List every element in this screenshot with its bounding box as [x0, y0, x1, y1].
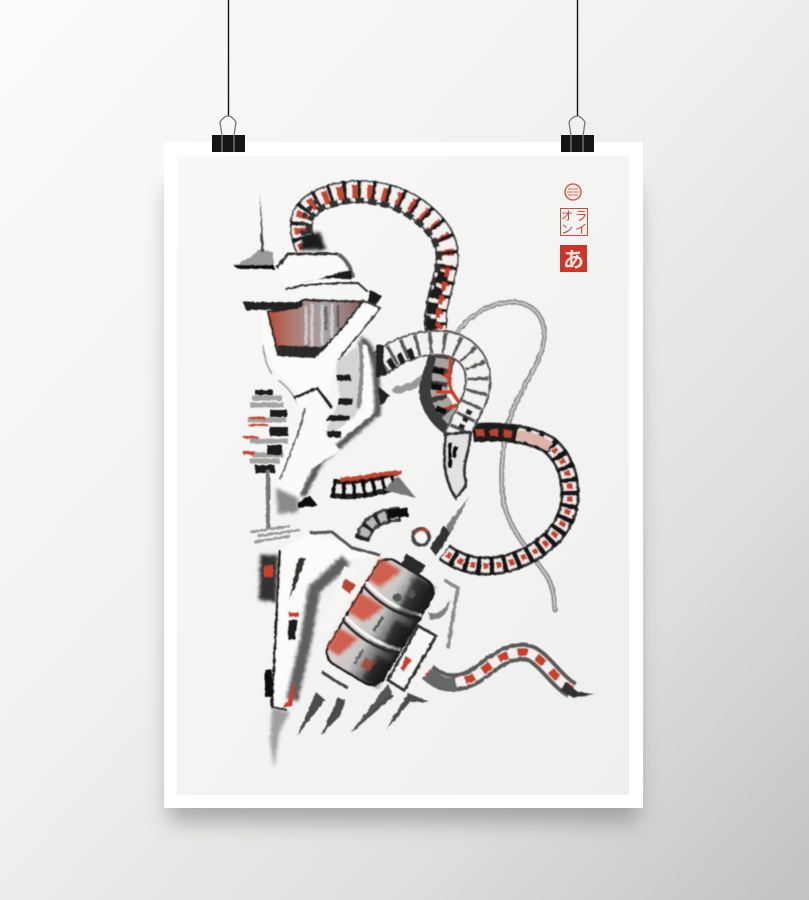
seal: katakana box: ン	[561, 222, 573, 236]
seal: red square stamp	[560, 245, 587, 272]
antenna and base	[233, 193, 274, 269]
red tube: lower bulge	[431, 345, 460, 426]
hanging strings	[228, 0, 578, 116]
visor	[243, 299, 362, 357]
canister side bracket	[322, 580, 458, 732]
seal: round stamp	[565, 184, 581, 200]
canister valve	[413, 497, 469, 556]
left fins	[243, 390, 288, 473]
poster paper panel	[177, 156, 629, 795]
oxygen canister	[322, 544, 445, 690]
lower small tube	[362, 512, 408, 540]
seal: katakana box: イ	[575, 222, 587, 236]
poster drop shadow	[168, 190, 638, 822]
chest plate	[268, 388, 340, 530]
bottom spikes	[297, 690, 430, 736]
seal: red square stamp: あ	[563, 249, 584, 272]
ink illustration	[233, 191, 594, 768]
red tube: top arch	[301, 191, 448, 330]
red tube: lower loop	[444, 432, 570, 566]
central vent column	[294, 340, 390, 496]
seal: katakana box	[560, 208, 588, 236]
seal: katakana box: ラ	[575, 209, 587, 223]
icon: right binder clip	[561, 116, 594, 152]
head dome	[277, 254, 368, 292]
icon: left binder clip	[212, 116, 245, 152]
short red tube at waist	[332, 473, 416, 498]
bottom right red tail	[428, 652, 594, 698]
lower left wedge armor	[250, 526, 380, 768]
thin grey loop cable	[396, 302, 555, 610]
grey striped tube	[380, 343, 478, 440]
seal: katakana box: オ	[561, 209, 573, 223]
white face	[262, 290, 382, 408]
black socket on head	[300, 232, 326, 250]
poster white border	[164, 142, 643, 808]
grey tube tip	[444, 432, 470, 498]
